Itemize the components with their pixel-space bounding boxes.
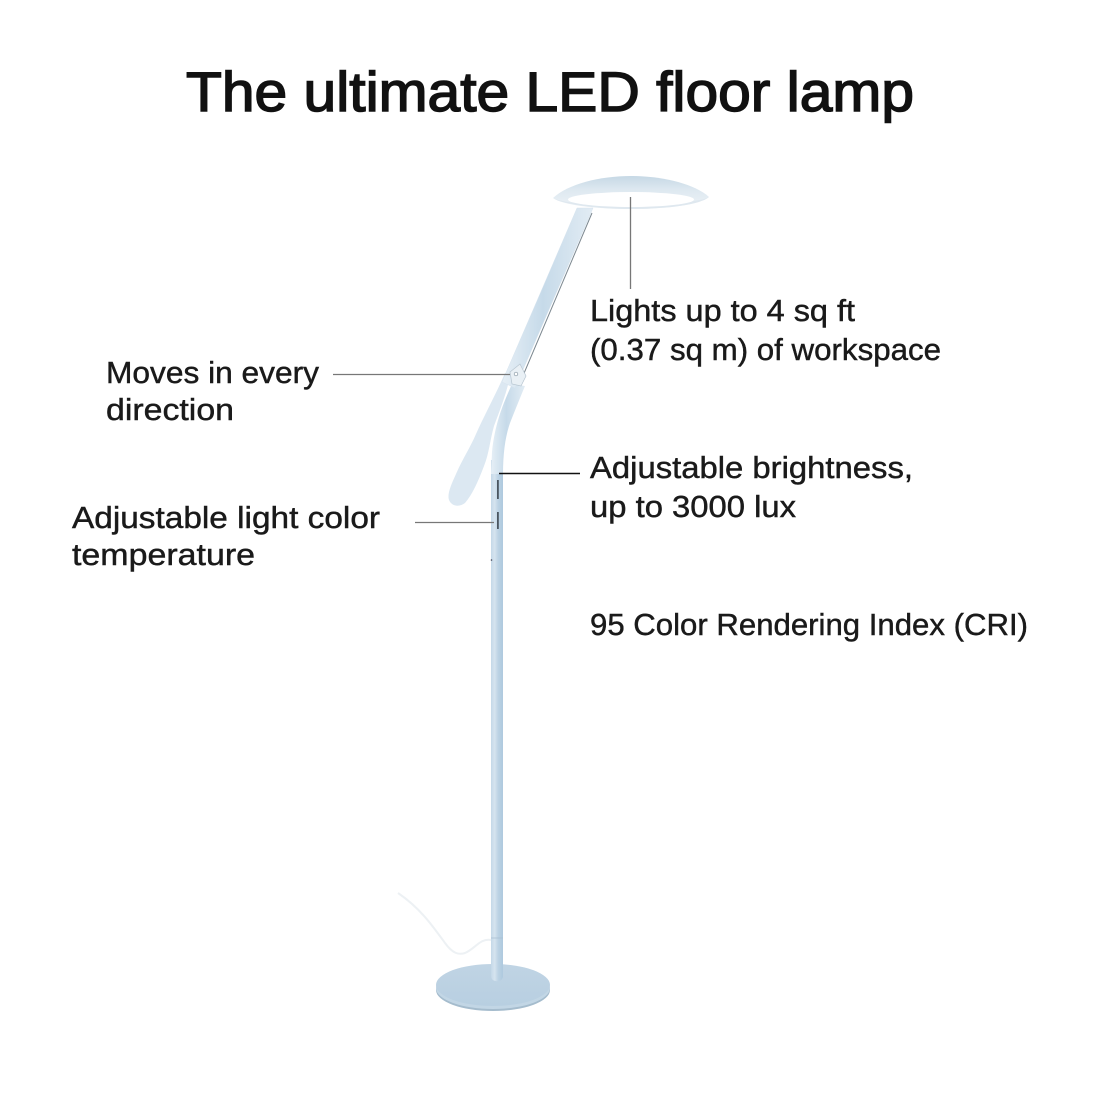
icon: LED light ring (568, 192, 694, 207)
callout: color temperature: Adjustable light color (72, 500, 380, 535)
icon: arm paddle counterweight (448, 373, 510, 506)
icon: power cord (398, 893, 491, 954)
callout: color rendering index: 95 Color Rendering Index (CRI) (590, 607, 1028, 642)
icon: thin support rod (522, 213, 592, 378)
icon: upper lamp arm (502, 208, 593, 388)
callout: movement: direction (106, 392, 234, 427)
icon: lamp head (553, 176, 709, 209)
callout: workspace coverage (590, 197, 941, 367)
floor lamp illustration (398, 176, 709, 1011)
icon: arm joint (510, 364, 526, 386)
callout: brightness: Adjustable brightness, (590, 450, 913, 485)
callout: workspace coverage: (0.37 sq m) of workspace (590, 332, 941, 367)
callout: brightness: up to 3000 lux (590, 489, 797, 524)
title: The ultimate LED floor lamp (186, 60, 914, 123)
callout: movement (106, 355, 510, 427)
callout: color temperature (72, 500, 494, 572)
callout: workspace coverage: Lights up to 4 sq ft (590, 293, 855, 328)
callout: brightness (499, 450, 913, 524)
icon: lamp pole (491, 460, 503, 981)
icon: round lamp base (436, 964, 550, 1011)
callout: movement: Moves in every (106, 355, 320, 390)
icon: curved neck (491, 384, 525, 474)
callout: color temperature: temperature (72, 537, 255, 572)
